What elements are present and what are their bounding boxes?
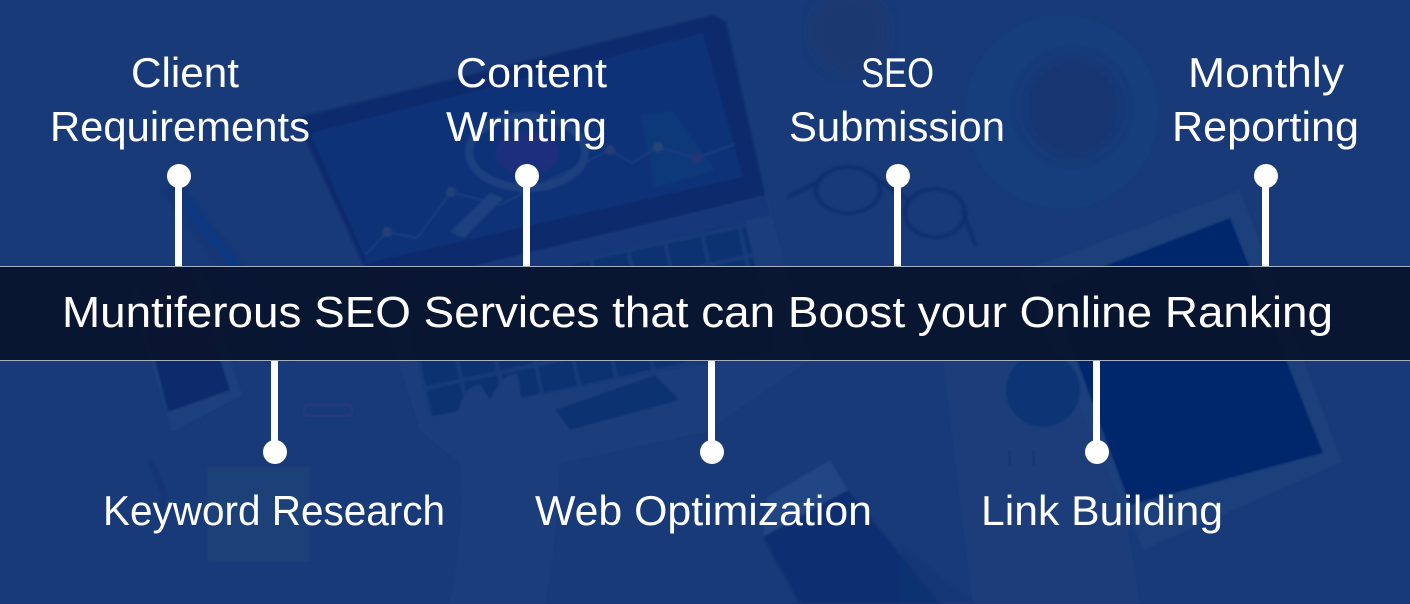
item: SEO Submission: SEO <box>861 49 934 96</box>
coffee cup <box>965 15 1159 209</box>
hand <box>450 374 560 604</box>
glasses <box>788 167 976 246</box>
chart line <box>365 142 735 255</box>
plant <box>810 0 890 74</box>
item: Client Requirements: Requirements <box>50 103 310 150</box>
tablet <box>1020 190 1342 550</box>
item: Content Wrinting: Content <box>456 49 607 96</box>
item: Monthly Reporting: Monthly <box>1188 49 1344 96</box>
sticky note <box>207 467 310 562</box>
item: Client Requirements: Client <box>131 49 239 96</box>
item: Client Requirements <box>50 49 310 266</box>
item: Web Optimization: Web Optimization <box>535 487 872 534</box>
phone <box>130 265 242 432</box>
item: Monthly Reporting: Reporting <box>1172 103 1359 150</box>
title: Muntiferous SEO Services that can Boost your Online Ranking <box>62 288 1333 337</box>
keyboard <box>400 222 775 417</box>
legend dots <box>1008 450 1035 466</box>
binder clip <box>150 460 165 520</box>
pie chart <box>1006 353 1080 427</box>
item: Monthly Reporting <box>1172 49 1359 266</box>
shirt cuff <box>763 460 848 537</box>
laptop hinge strip <box>375 195 770 305</box>
left dark edge <box>900 545 975 604</box>
item: Link Building: Link Building <box>981 487 1223 534</box>
item: Content Wrinting <box>446 49 607 266</box>
laptop screen <box>310 33 743 263</box>
report paper <box>943 361 1140 604</box>
item: SEO Submission: Submission <box>789 103 1005 150</box>
central banner <box>0 266 1410 361</box>
item: Content Wrinting: Wrinting <box>446 103 607 150</box>
magnifier <box>469 116 585 188</box>
paper clip <box>304 405 352 416</box>
laptop base <box>375 190 810 480</box>
item: Link Building <box>981 361 1223 534</box>
sleeve <box>763 490 940 604</box>
item: Keyword Research <box>103 361 445 534</box>
laptop lid <box>296 15 765 290</box>
item: SEO Submission <box>789 49 1005 266</box>
pens <box>160 180 312 362</box>
item: Web Optimization <box>535 361 872 534</box>
item: Keyword Research: Keyword Research <box>103 487 445 534</box>
